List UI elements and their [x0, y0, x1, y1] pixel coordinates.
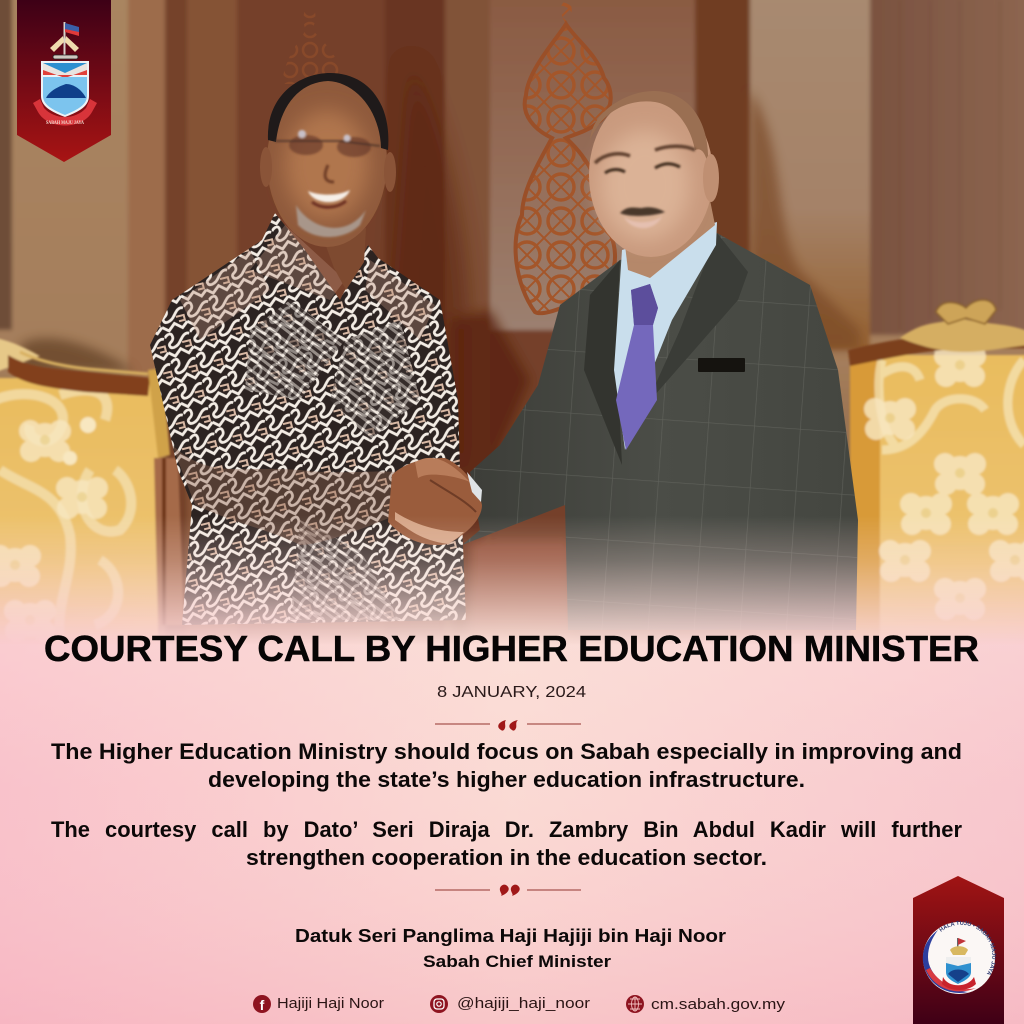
quote paragraph two: The courtesy call by Dato’ Seri Diraja Dr. Zambry Bin Abdul Kadir will further [51, 817, 962, 842]
left man: head [260, 73, 396, 290]
crest: motto scroll [33, 99, 97, 126]
attribution role: Sabah Chief Minister [423, 953, 612, 971]
left man: batik shirt [150, 213, 466, 625]
quote paragraph one: The Higher Education Ministry should focus on Sabah especially in improving and [51, 739, 962, 764]
social: instagram: @hajiji_haji_noor [457, 995, 590, 1012]
circular logo: Hala Tuju Sabah Maju Jaya [922, 920, 996, 994]
circular logo: Hala Tuju Sabah Maju Jaya: HALA TUJU • SABAH MAJU JAYA [939, 920, 996, 975]
social: website [626, 995, 786, 1013]
right chair [848, 300, 1024, 650]
right man: shirt and tie [614, 222, 745, 450]
quote paragraph two: strengthen cooperation in the education sector. [246, 845, 767, 870]
quote paragraph one: developing the state’s higher education infrastructure. [208, 767, 805, 792]
social: facebook: f [260, 997, 265, 1013]
left chair [0, 338, 184, 653]
quote paragraph one [51, 739, 962, 792]
social: website: cm.sabah.gov.my [651, 996, 786, 1013]
photo: handshake between two leaders [0, 0, 1024, 654]
title: COURTESY CALL BY HIGHER EDUCATION MINISTER [44, 628, 979, 669]
right man: head [589, 91, 719, 278]
quote paragraph two [51, 817, 962, 870]
handshake [388, 458, 482, 545]
crest: flag and crown [50, 22, 79, 59]
crest: shield [41, 61, 89, 117]
photo backdrop: wall and wood panels [0, 0, 1024, 654]
social: facebook: Hajiji Haji Noor [277, 995, 384, 1012]
crest: motto scroll: SABAH MAJU JAYA [46, 121, 84, 126]
ribbon shape [913, 876, 1004, 1024]
right man: suit [462, 233, 858, 630]
ribbon shape [17, 0, 111, 162]
closing quote divider [435, 885, 581, 896]
social: instagram [430, 995, 590, 1013]
ornament: small carving above left man [284, 12, 338, 84]
bottom-right ribbon with logo [913, 876, 1004, 1024]
date: 8 JANUARY, 2024 [437, 684, 586, 701]
top-left ribbon with Sabah crest [17, 0, 111, 162]
opening quote divider [435, 720, 581, 731]
attribution name: Datuk Seri Panglima Haji Hajiji bin Haji Noor [295, 925, 726, 946]
ornament: carved door arabesque [516, 0, 615, 313]
